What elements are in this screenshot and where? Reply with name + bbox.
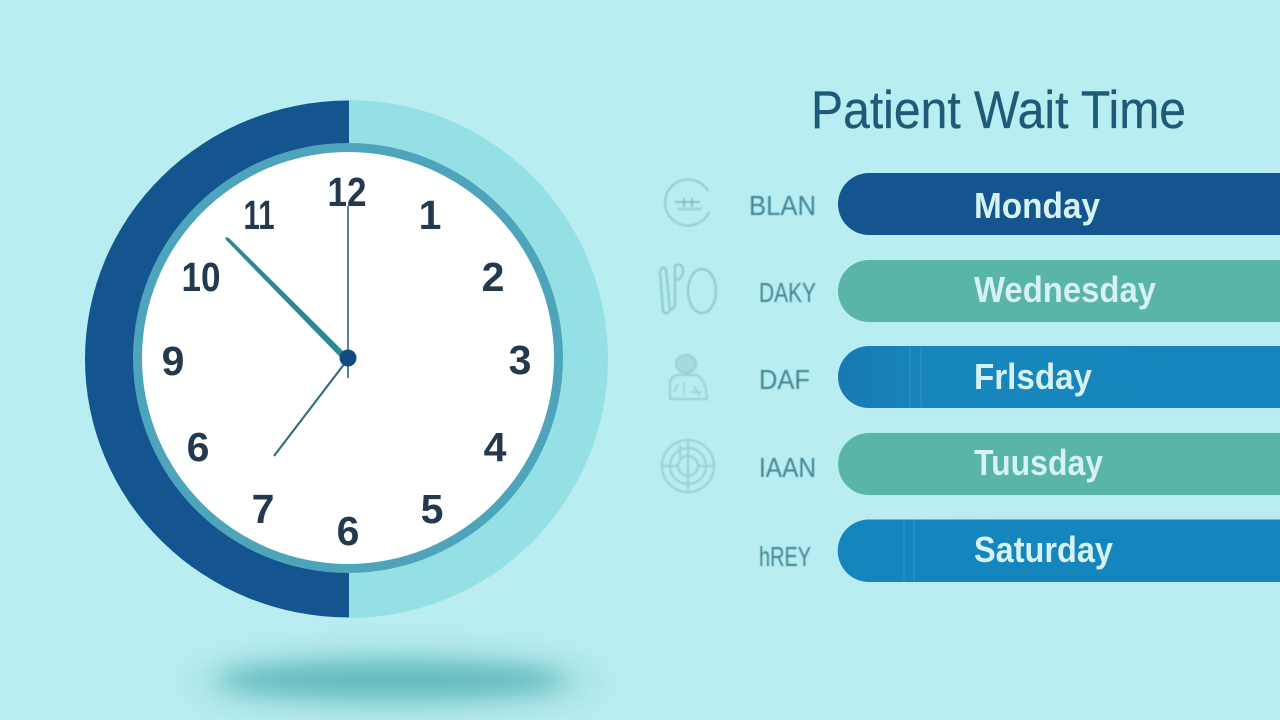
side label: BLAN	[749, 190, 816, 221]
numerals	[162, 169, 531, 554]
numerals: 2	[482, 254, 504, 300]
bar label: Tuusday	[974, 442, 1103, 483]
outer ring: dark half	[85, 100, 349, 618]
numerals: 11	[244, 192, 274, 238]
row: Monday	[665, 173, 1280, 235]
outer ring: light half	[349, 100, 608, 618]
icon: tube and capsule	[660, 265, 716, 313]
numerals: 12	[328, 169, 366, 215]
icon: person at desk	[670, 355, 707, 399]
row: Saturday	[759, 520, 1280, 582]
numerals: 10	[182, 254, 220, 300]
bar stripes	[910, 347, 921, 407]
bar label: Monday	[974, 185, 1100, 226]
clock	[85, 100, 608, 618]
numerals: 3	[509, 337, 531, 383]
bar stripes	[904, 520, 914, 581]
bar	[838, 520, 1280, 582]
side label: hREY	[759, 541, 811, 572]
bar	[838, 346, 1280, 408]
center pin	[340, 350, 356, 366]
numerals: 5	[421, 486, 443, 532]
bar label: Saturday	[974, 529, 1113, 570]
numerals: 6	[337, 508, 359, 554]
minute hand	[225, 237, 345, 358]
bar label: Frlsday	[974, 356, 1092, 397]
numerals: 1	[419, 192, 441, 238]
clock face	[142, 152, 554, 564]
bar	[838, 433, 1280, 495]
side label: IAAN	[759, 452, 816, 483]
numerals: 6	[187, 424, 209, 470]
row: Tuesday	[662, 433, 1280, 495]
numerals: 9	[162, 338, 184, 384]
hour hand	[274, 363, 345, 456]
bar label: Wednesday	[974, 269, 1156, 310]
bar	[838, 260, 1280, 322]
numerals: 4	[484, 424, 507, 470]
side label: DAF	[759, 364, 810, 395]
icon: maze globe	[662, 440, 714, 492]
bar	[838, 173, 1280, 235]
numerals: 7	[252, 486, 274, 532]
row: Friday	[670, 346, 1280, 408]
clock drop shadow	[190, 648, 600, 716]
title: Patient Wait Time	[811, 81, 1186, 140]
icon: clock circle	[665, 179, 709, 225]
row: Wednesday	[660, 260, 1280, 322]
clock rim	[133, 143, 563, 573]
side label: DAKY	[759, 277, 816, 308]
second hand	[347, 206, 349, 378]
